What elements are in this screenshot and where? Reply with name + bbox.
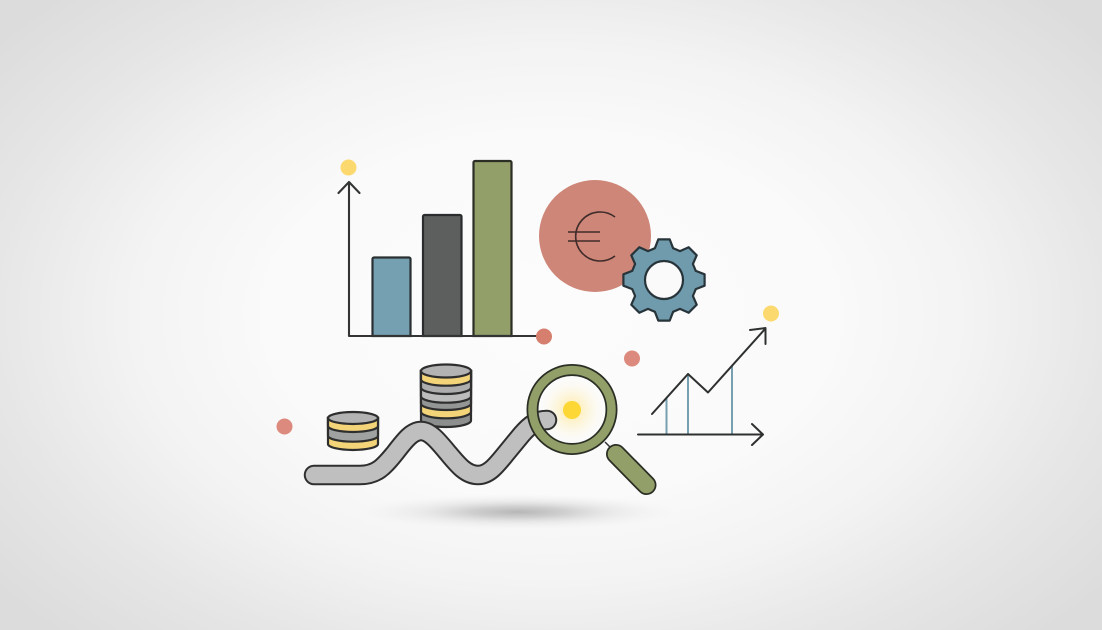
dot: red centre bbox=[624, 350, 640, 366]
lens glow bbox=[540, 378, 604, 442]
handle connector bbox=[605, 442, 612, 449]
bar: green bbox=[474, 161, 512, 336]
wavy trend ribbon bbox=[314, 420, 547, 475]
icon: magnifying glass bbox=[532, 370, 646, 485]
ground shadow bbox=[358, 494, 678, 530]
chart axes bbox=[338, 182, 538, 336]
dot: red axis end bbox=[536, 328, 552, 344]
chart drop lines bbox=[666, 366, 732, 434]
lens highlight dot bbox=[563, 401, 581, 419]
dot: yellow trend top bbox=[763, 306, 779, 322]
line chart with arrow bbox=[638, 328, 766, 445]
x axis arrow bbox=[638, 424, 763, 445]
lens ring bbox=[532, 370, 612, 449]
icon: short coin stack bbox=[328, 412, 378, 450]
bar chart bbox=[338, 160, 552, 344]
bar: dark grey bbox=[423, 215, 462, 336]
euro symbol bbox=[568, 212, 615, 261]
icon: tall coin stack bbox=[421, 364, 471, 427]
bar: blue bbox=[372, 258, 410, 336]
dot: yellow axis top bbox=[340, 160, 356, 176]
trend arrow bbox=[652, 328, 766, 414]
icon: euro coin bbox=[539, 180, 651, 292]
handle bbox=[616, 454, 646, 485]
icon: gear bbox=[623, 239, 705, 321]
dot: red left bbox=[276, 418, 292, 434]
